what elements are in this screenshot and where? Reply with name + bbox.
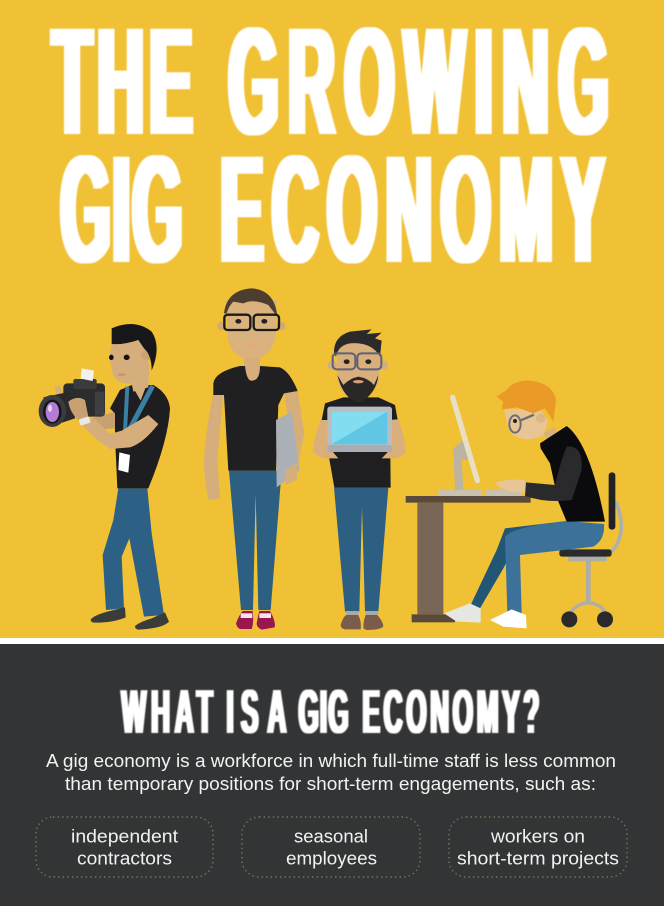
title: GIG (60, 124, 182, 295)
heading: A (268, 678, 286, 747)
heading: GIG (298, 678, 348, 747)
figure: person at computer (444, 381, 605, 628)
box: seasonal employees (242, 817, 420, 877)
intro text: A gig economy is a workforce in which full-time staff is less common (46, 751, 616, 771)
intro text (46, 751, 616, 794)
figure: photographer (39, 324, 170, 630)
desk and monitor (406, 397, 531, 622)
title: GROWING (228, 0, 609, 167)
box: seasonal employees: seasonal (294, 826, 368, 846)
box: independent contractors (36, 817, 213, 877)
box: seasonal employees: employees (286, 848, 377, 868)
figure: person with folder (204, 288, 304, 630)
heading: ECONOMY? (362, 678, 539, 747)
title: ECONOMY (220, 124, 604, 295)
heading (122, 678, 539, 747)
intro text: than temporary positions for short-term engagements, such as: (65, 774, 596, 794)
office chair (559, 472, 621, 627)
figure: person with laptop (313, 329, 406, 630)
title (52, 0, 609, 295)
heading: IS (226, 678, 258, 747)
box: workers on short-term projects: workers on (490, 826, 585, 846)
title: THE (52, 0, 192, 167)
box: workers on short-term projects: short-term projects (457, 848, 619, 868)
box: independent contractors: independent (71, 826, 178, 846)
heading: WHAT (122, 678, 213, 747)
box: independent contractors: contractors (77, 848, 172, 868)
box: workers on short-term projects (449, 817, 627, 877)
